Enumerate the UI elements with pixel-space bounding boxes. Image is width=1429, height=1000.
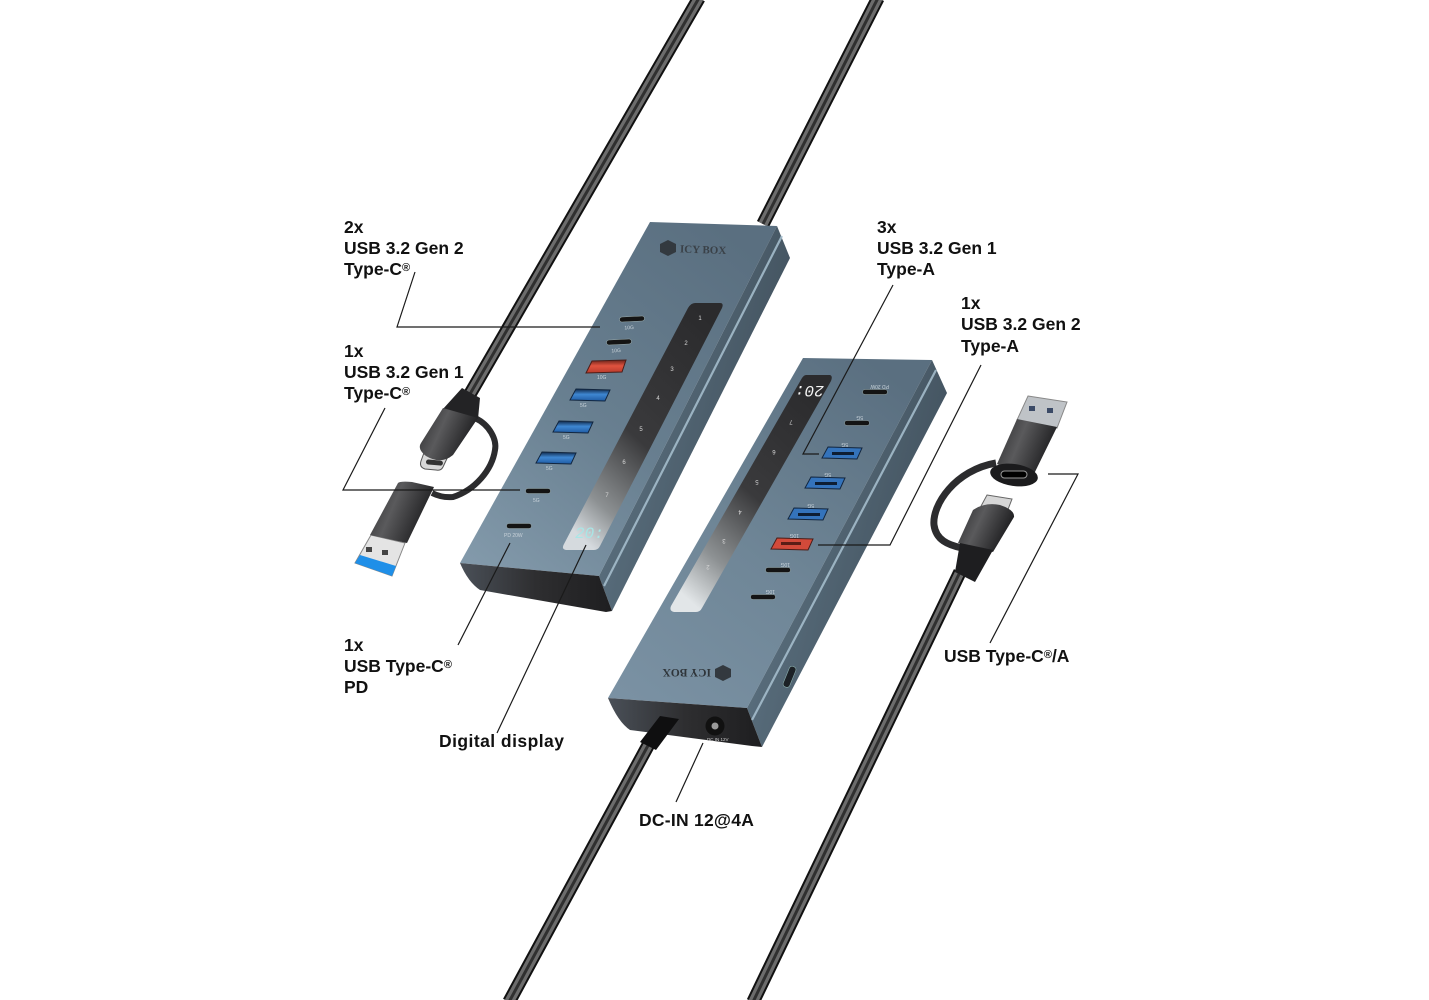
hub B port: USB-C PD — [862, 383, 889, 394]
callout: USB Type-C/A — [944, 474, 1078, 666]
callout: 1x USB 3.2 Gen 2 Type-A: USB 3.2 Gen 2 — [961, 314, 1081, 334]
callout: 1x USB Type-C PD: 1x — [344, 635, 364, 655]
callout: 1x USB 3.2 Gen 1 Type-C: USB 3.2 Gen 1 — [344, 362, 464, 382]
hub A port: USB-C PD — [504, 524, 532, 539]
hub A port: red USB-A: 10G — [597, 375, 607, 381]
right adapter loop strap — [934, 463, 996, 548]
hub B digital display reading: 20: — [795, 381, 824, 399]
cable: right adapter — [753, 572, 960, 1000]
hub A panel numbers: 1 — [698, 316, 702, 322]
hub A panel numbers: 5 — [639, 427, 643, 433]
hub B front face — [608, 698, 762, 747]
callout: 3x USB 3.2 Gen 1 Type-A: 3x — [877, 217, 897, 237]
callout: 1x USB 3.2 Gen 1 Type-C: 1x — [344, 341, 364, 361]
callout: 1x USB 3.2 Gen 2 Type-A — [818, 293, 1081, 545]
hub A port: red USB-A — [586, 360, 626, 381]
left adapter: USB-C and USB-A — [355, 388, 495, 576]
callout: 1x USB 3.2 Gen 1 Type-C: Type-C — [344, 383, 410, 403]
right adapter USB-C body — [958, 504, 1014, 552]
hub B logo — [662, 665, 731, 681]
hub A panel numbers: 4 — [656, 396, 660, 402]
hub B port: USB-C 10G: 10G — [780, 561, 790, 567]
right adapter collar — [955, 543, 993, 582]
callout: 2x USB 3.2 Gen 2 Type-C: Type-C — [344, 259, 410, 279]
callout: Digital display: Digital display — [439, 731, 564, 751]
hub B side port — [782, 665, 797, 688]
hub B port: USB-C 10G — [766, 561, 790, 572]
hub B port: blue USB-A 1: 5G — [841, 441, 848, 447]
hub A digital display reading: 20: — [575, 525, 604, 543]
hub A display panel — [563, 303, 723, 550]
left adapter USB-A body — [370, 482, 434, 543]
hub A port: blue USB-A 1 — [570, 389, 610, 409]
hub A port: USB-C 10G second — [606, 339, 632, 355]
hub B panel numbers: 5 — [755, 478, 759, 484]
hub A front face — [460, 563, 612, 612]
callout: 1x USB 3.2 Gen 2 Type-A: 1x — [961, 293, 981, 313]
callout: 2x USB 3.2 Gen 2 Type-C: ® — [402, 262, 410, 274]
left adapter USB-C body — [420, 408, 478, 460]
hub A panel numbers — [605, 316, 702, 499]
hub A port: blue USB-A 1: 5G — [580, 403, 587, 409]
callout: 2x USB 3.2 Gen 2 Type-C — [344, 217, 600, 327]
hub A port: blue USB-A 3: 5G — [546, 466, 553, 472]
right adapter USB-A metal plug — [1017, 396, 1067, 428]
hub A port: blue USB-A 3 — [536, 452, 576, 472]
hub B port: blue USB-A 3: 5G — [807, 502, 814, 508]
hub A panel numbers: 6 — [622, 460, 626, 466]
hub B port: red USB-A — [771, 532, 813, 550]
hub A port: blue USB-A 2 — [553, 421, 593, 441]
hub A panel numbers: 2 — [684, 341, 688, 347]
hub B port: blue USB-A 2 — [805, 471, 845, 489]
left adapter USB-A blue tongue — [355, 555, 396, 576]
hub A top face — [460, 222, 777, 576]
hub B top face — [608, 358, 932, 708]
hub B port: blue USB-A 3 — [788, 502, 828, 520]
hub B port: USB-C 5G — [844, 414, 870, 426]
hub A: left hub — [460, 222, 790, 612]
hub B port: blue USB-A 2: 5G — [824, 471, 831, 477]
callout: 3x USB 3.2 Gen 1 Type-A: USB 3.2 Gen 1 — [877, 238, 997, 258]
hub B panel numbers — [706, 418, 793, 569]
callout: 2x USB 3.2 Gen 2 Type-C: 2x — [344, 217, 364, 237]
right adapter female USB-C opening — [989, 461, 1039, 489]
hub B display panel — [670, 375, 832, 612]
cable: top of hub A — [763, 0, 878, 224]
callout: 3x USB 3.2 Gen 1 Type-A: Type-A — [877, 259, 935, 279]
callout: USB Type-C/A: ® — [1044, 649, 1052, 661]
callout: 1x USB 3.2 Gen 2 Type-A: Type-A — [961, 336, 1019, 356]
callout: 3x USB 3.2 Gen 1 Type-A — [803, 217, 997, 454]
hub B panel numbers: 7 — [789, 418, 793, 424]
left adapter USB-C metal tip — [420, 450, 451, 470]
hub B panel numbers: 4 — [738, 508, 742, 514]
hub B panel numbers: 6 — [772, 448, 776, 454]
hub A port: USB-C 10G: 10G — [624, 325, 634, 331]
hub A port: USB-C 5G: 5G — [533, 498, 540, 504]
right adapter USB-C metal tip — [980, 495, 1012, 512]
hub A port: USB-C 5G — [526, 488, 550, 504]
hub A port: USB-C PD: PD 20W — [504, 533, 523, 539]
hub B panel numbers: 3 — [722, 537, 726, 543]
hub B logo: ICY BOX — [662, 666, 711, 678]
hub B port: USB-C 10G second — [750, 588, 776, 600]
callout: Digital display — [439, 545, 586, 751]
hub B port: USB-C 10G second: 10G — [765, 588, 775, 594]
hub A port: USB-C 10G — [619, 316, 645, 332]
hub B cable boot — [640, 716, 679, 750]
right adapter body — [997, 419, 1057, 478]
hub B port: USB-C 5G: 5G — [856, 414, 863, 420]
callout: 1x USB Type-C PD: ® — [444, 659, 452, 671]
hub A port: USB-C 10G second: 10G — [611, 348, 621, 354]
hub A logo: ICY BOX — [680, 243, 727, 257]
callout: 1x USB 3.2 Gen 1 Type-C — [343, 341, 520, 490]
right adapter: USB-A and USB-C — [934, 396, 1067, 582]
hub B port: USB-C PD: PD 20W — [870, 383, 889, 389]
hub A panel numbers: 7 — [605, 493, 609, 499]
callout: DC-IN 12@4A — [639, 743, 754, 830]
callout: 1x USB Type-C PD — [344, 543, 510, 697]
hub A port: blue USB-A 2: 5G — [563, 435, 570, 441]
hub A side face — [599, 226, 790, 611]
cable: left adapter — [470, 0, 699, 394]
callout: USB Type-C/A: USB Type-C — [944, 646, 1044, 666]
left adapter loop strap — [432, 418, 495, 497]
callout: DC-IN 12@4A: DC-IN 12@4A — [639, 810, 754, 830]
cable: hub B to bottom — [509, 740, 651, 1000]
hub B DC jack: DC IN 12V — [707, 737, 729, 742]
hub B port: blue USB-A 1 — [822, 441, 862, 459]
callout: 1x USB Type-C PD: USB Type-C — [344, 656, 452, 676]
callout: 1x USB Type-C PD: PD — [344, 677, 368, 697]
callout: USB Type-C/A: /A — [1052, 646, 1070, 666]
hub A logo — [660, 240, 727, 257]
hub B panel numbers: 2 — [706, 563, 710, 569]
left adapter cable boot — [443, 388, 480, 419]
callout: 1x USB 3.2 Gen 1 Type-C: ® — [402, 386, 410, 398]
hub B DC jack — [706, 716, 729, 742]
hub B port: red USB-A: 10G — [789, 532, 799, 538]
callout: 2x USB 3.2 Gen 2 Type-C: USB 3.2 Gen 2 — [344, 238, 464, 258]
hub B: right hub — [608, 358, 947, 750]
left adapter USB-A metal plug — [355, 535, 405, 576]
hub A panel numbers: 3 — [670, 367, 674, 373]
hub B side face — [747, 360, 947, 747]
